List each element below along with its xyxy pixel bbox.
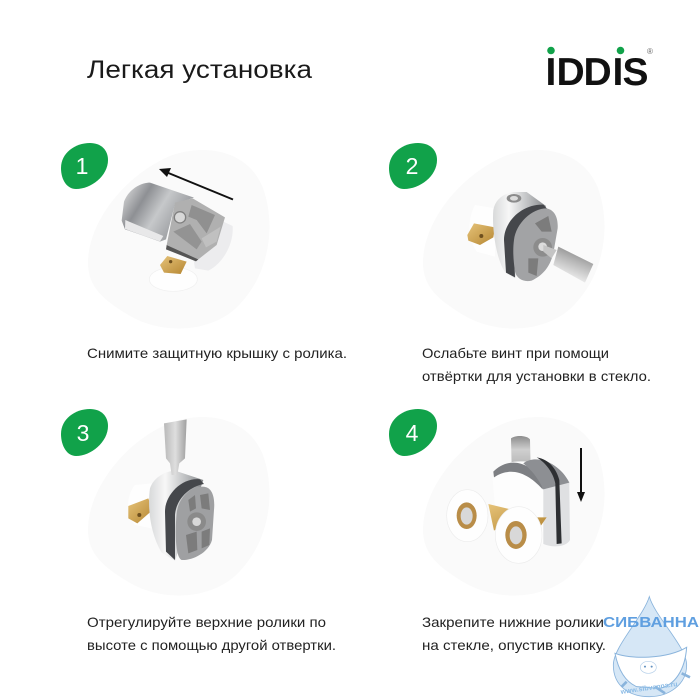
caption 2: отвёртки для установки в стекло. <box>422 368 651 384</box>
badge 3: 3 <box>77 420 89 446</box>
photo blob 2 <box>423 150 604 328</box>
caption 3: Отрегулируйте верхние ролики по <box>87 614 326 630</box>
product photo 1: roller with cover <box>122 183 233 291</box>
caption 1: Снимите защитную крышку с ролика. <box>87 345 347 361</box>
watermark url: www.sibvanna.ru <box>619 681 678 696</box>
badge 4 <box>389 409 437 456</box>
title: Легкая установка <box>87 56 312 84</box>
logo: IDDIS: IDDIS <box>546 51 649 94</box>
caption 4: Закрепите нижние ролики <box>422 614 604 630</box>
caption 2: Ослабьте винт при помощи <box>422 345 609 361</box>
badge 1 <box>61 143 108 189</box>
photo blob 4 <box>423 417 604 596</box>
caption 4 <box>422 614 606 653</box>
panel: step 4 <box>389 409 606 653</box>
badge 2 <box>389 143 437 189</box>
badge 4: 4 <box>406 420 419 446</box>
product photo 3: screwdriver from above <box>128 419 214 561</box>
product photo 2: screwdriver on bolt <box>467 192 593 283</box>
watermark drop and bath <box>613 597 690 697</box>
badge 2: 2 <box>406 153 418 179</box>
product photo 4: rollers <box>447 436 570 563</box>
caption 2 <box>422 345 651 384</box>
badge 3 <box>61 409 108 456</box>
caption 3: высоте с помощью другой отвертки. <box>87 637 336 653</box>
panel: step 1 <box>61 143 347 361</box>
photo blob 1 <box>88 150 269 328</box>
arrow: left <box>159 168 233 200</box>
watermark: Sibvanna <box>603 597 700 697</box>
badge 1: 1 <box>76 153 88 179</box>
logo: IDDIS: ® <box>647 47 653 56</box>
watermark wordmark: СИБВАННА <box>603 615 700 631</box>
arrow: down <box>577 448 585 502</box>
caption 4: на стекле, опустив кнопку. <box>422 637 606 653</box>
panel: step 2 <box>389 143 651 384</box>
panel: step 3 <box>61 409 336 653</box>
caption 3 <box>87 614 336 653</box>
photo blob 3 <box>88 417 269 596</box>
